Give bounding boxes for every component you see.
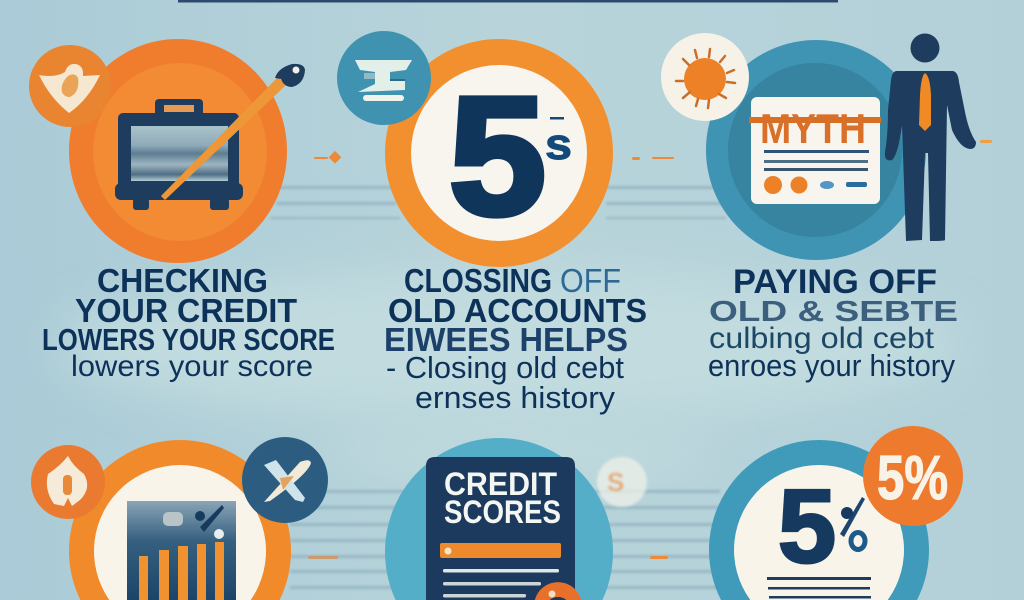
bar chart — [127, 501, 236, 600]
text: checking your credit — [42, 262, 335, 383]
icon: briefcase — [115, 99, 243, 210]
card: credit scores: SCORES — [444, 494, 561, 530]
number five percent — [778, 469, 865, 585]
text: paying off: PAYING OFF — [733, 263, 937, 301]
text: closing old accounts: OFF — [560, 262, 621, 299]
text: paying off: culbing old cebt — [709, 322, 935, 355]
small s: s — [545, 120, 572, 169]
text: closing old accounts: CLOSSING — [404, 262, 552, 299]
text: checking your credit: lowers your score — [71, 350, 313, 383]
text: paying off: enroes your history — [708, 348, 955, 383]
panel: credit scores — [385, 438, 647, 600]
text: closing old accounts — [384, 262, 647, 415]
icon: person — [885, 34, 976, 241]
icon: 5% badge — [863, 426, 963, 526]
panel: paying off myth — [661, 33, 976, 260]
panel: closing old accounts — [337, 31, 613, 267]
text: paying off — [708, 263, 958, 383]
text lines — [767, 577, 871, 598]
panel: chart — [31, 437, 328, 600]
card: credit scores: CREDIT — [444, 466, 557, 502]
text: closing old accounts: - Closing old cebt — [386, 350, 624, 385]
text: paying off: OLD & SEBTE — [709, 296, 958, 328]
text: checking your credit: YOUR CREDIT — [75, 292, 297, 329]
text: closing old accounts: OLD ACCOUNTS — [388, 292, 647, 329]
icon: faded coin — [597, 457, 647, 507]
text: checking your credit: CHECKING — [97, 262, 268, 299]
card: credit scores — [426, 457, 575, 600]
icon: pencil — [161, 64, 305, 200]
icon: orange badge — [31, 445, 105, 519]
card: myth: MYTH — [760, 105, 866, 152]
number five: 5 — [449, 62, 546, 250]
icon: orange seal — [535, 582, 581, 600]
background stripes — [270, 186, 726, 589]
top bar — [178, 0, 838, 2]
icon: faded coin: S — [607, 467, 624, 497]
card: myth — [749, 97, 881, 204]
panel: five percent — [709, 426, 963, 600]
text: closing old accounts: ernses history — [415, 380, 616, 415]
icon: blue badge — [242, 437, 328, 523]
panel: checking your credit — [29, 39, 305, 263]
number five percent: 5 — [778, 469, 836, 585]
connector dashes — [308, 140, 992, 559]
icon: badge — [29, 45, 111, 127]
text: checking your credit: LOWERS YOUR SCORE — [42, 322, 335, 357]
icon: teal badge — [337, 31, 431, 125]
text: closing old accounts: EIWEES HELPS — [384, 321, 628, 358]
icon: sun badge — [661, 33, 749, 121]
icon: 5% badge: 5% — [877, 444, 948, 513]
